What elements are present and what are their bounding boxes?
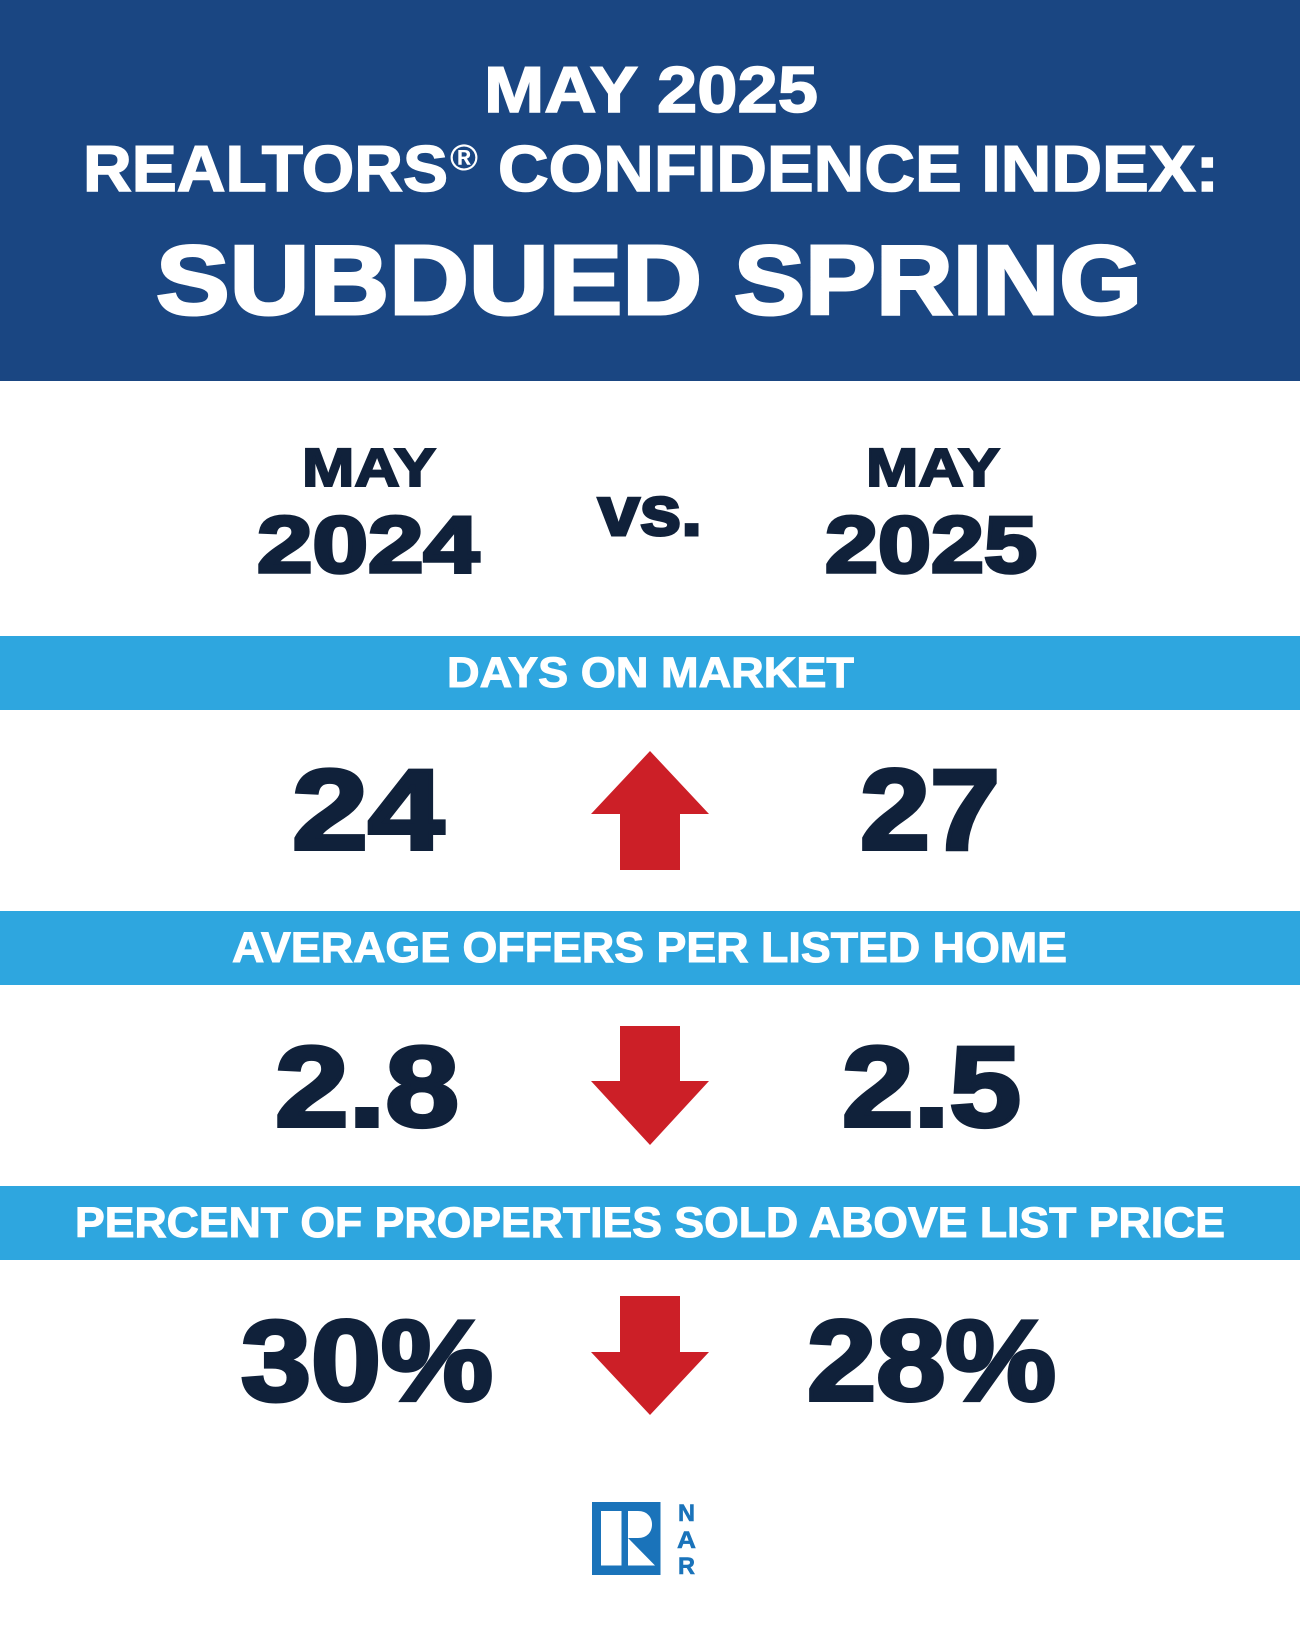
logo: NAR: R: [678, 1553, 695, 1580]
title: date line: MAY 2025: [484, 53, 818, 126]
title: index name: [83, 132, 1219, 205]
value: days on market 2025: 27: [860, 747, 1000, 874]
column heading: May 2024: MAY: [302, 438, 436, 498]
title: headline: SPRING: [734, 225, 1142, 335]
section band: average offers: AVERAGE OFFERS PER LISTED HOME: [232, 924, 1067, 972]
section band: percent above list: PERCENT OF PROPERTIES SOLD ABOVE LIST PRICE: [75, 1199, 1225, 1247]
value: offers 2025: 2.5: [842, 1024, 1021, 1151]
column heading: May 2025: [825, 438, 1037, 589]
section band: percent above list: [0, 1186, 1300, 1260]
section band: days on market: [0, 636, 1300, 710]
column heading: May 2025: 2025: [825, 500, 1037, 589]
value: percent 2025: 28%: [807, 1298, 1056, 1425]
arrow: up: [591, 751, 709, 870]
title: headline: SUBDUED: [156, 225, 702, 335]
section band: average offers: [0, 911, 1300, 985]
column heading: May 2024: 2024: [257, 500, 480, 589]
title: index name: CONFIDENCE INDEX:: [498, 132, 1219, 205]
vs. label: vs.: [598, 472, 702, 550]
title: index name: REALTORS: [83, 132, 448, 205]
logo: NAR: N: [678, 1500, 695, 1527]
logo: NAR: [592, 1500, 696, 1580]
value: percent 2024: 30%: [241, 1298, 493, 1425]
header banner: [0, 0, 1300, 381]
section band: days on market: DAYS ON MARKET: [447, 649, 854, 697]
value: days on market 2024: 24: [292, 747, 444, 874]
column heading: May 2024: [257, 438, 480, 589]
arrow: down: [591, 1026, 709, 1145]
title: index name: ®: [450, 137, 478, 178]
title: headline: [156, 225, 1142, 335]
logo: NAR: A: [677, 1527, 696, 1554]
arrow: down: [591, 1296, 709, 1415]
column heading: May 2025: MAY: [866, 438, 1000, 498]
value: offers 2024: 2.8: [275, 1024, 459, 1151]
